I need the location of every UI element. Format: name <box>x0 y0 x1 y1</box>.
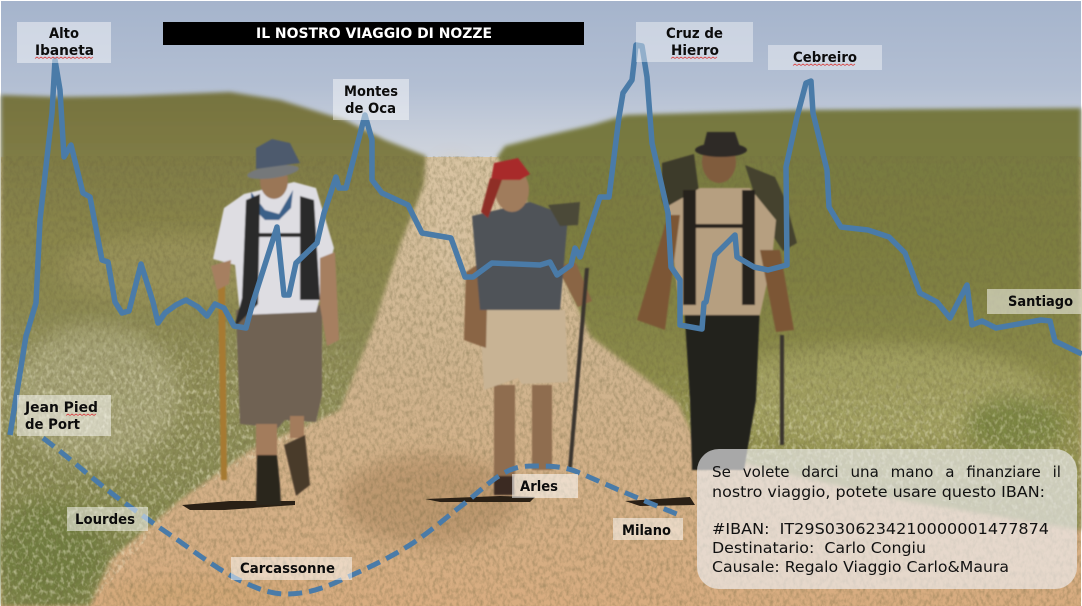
grain texture <box>1 156 1081 606</box>
label: Montes de Oca: Montes <box>344 84 398 100</box>
right grassy field <box>497 108 1081 530</box>
label: Carcassonne <box>231 557 352 580</box>
label: Arles <box>512 474 578 498</box>
label: Jean Pied de Port: de Port <box>25 417 80 433</box>
label: Cruz de Hierro: Cruz de <box>666 26 723 42</box>
walker right <box>637 132 797 470</box>
sky <box>1 1 1081 171</box>
walker left <box>211 139 339 505</box>
wildflower speckle <box>1 316 1081 606</box>
label: Carcassonne: Carcassonne <box>240 561 335 577</box>
callout: IBAN donation box: Se volete darci una mano a finanziare il <box>712 463 1061 481</box>
callout: IBAN donation box: nostro viaggio, potete usare questo IBAN: <box>712 483 1045 501</box>
label: Cebreiro: Cebreiro <box>793 50 857 66</box>
label: Cruz de Hierro: Hierro <box>671 43 719 59</box>
label: Lourdes: Lourdes <box>75 512 135 528</box>
label: Lourdes <box>67 507 148 531</box>
label: Montes de Oca <box>333 79 409 120</box>
route: dashed approach path <box>43 438 682 594</box>
label: Santiago <box>987 289 1081 314</box>
label: Milano: Milano <box>622 523 671 539</box>
left grassy hill <box>1 92 426 606</box>
callout: IBAN donation box: Destinatario: Carlo Congiu <box>712 539 926 557</box>
callout: IBAN donation box: #IBAN: IT29S0306234210000001477874 <box>712 520 1049 538</box>
label: Santiago: Santiago <box>1008 294 1073 310</box>
road and foreground ground <box>1 157 1081 606</box>
label: Milano <box>613 518 683 540</box>
walker shadows <box>182 496 695 510</box>
label: Montes de Oca: de Oca <box>345 101 396 117</box>
callout: IBAN donation box <box>697 449 1077 589</box>
label: Cebreiro <box>768 45 882 70</box>
title bar: IL NOSTRO VIAGGIO DI NOZZE <box>256 26 492 42</box>
lighter flowers and grass patches <box>0 160 1065 606</box>
label: Cruz de Hierro <box>636 22 753 62</box>
label: Alto Ibaneta <box>17 22 111 63</box>
label: Arles: Arles <box>520 479 558 495</box>
label: Alto Ibaneta: Alto <box>49 26 79 42</box>
label: Jean Pied de Port: Jean Pied <box>24 400 98 416</box>
route: elevation profile line <box>10 45 1082 435</box>
walker centre <box>464 158 592 495</box>
label: Alto Ibaneta: Ibaneta <box>35 43 94 59</box>
label: Jean Pied de Port <box>17 395 111 436</box>
title bar <box>163 22 584 45</box>
callout: IBAN donation box: Causale: Regalo Viaggio Carlo&Maura <box>712 558 1009 576</box>
